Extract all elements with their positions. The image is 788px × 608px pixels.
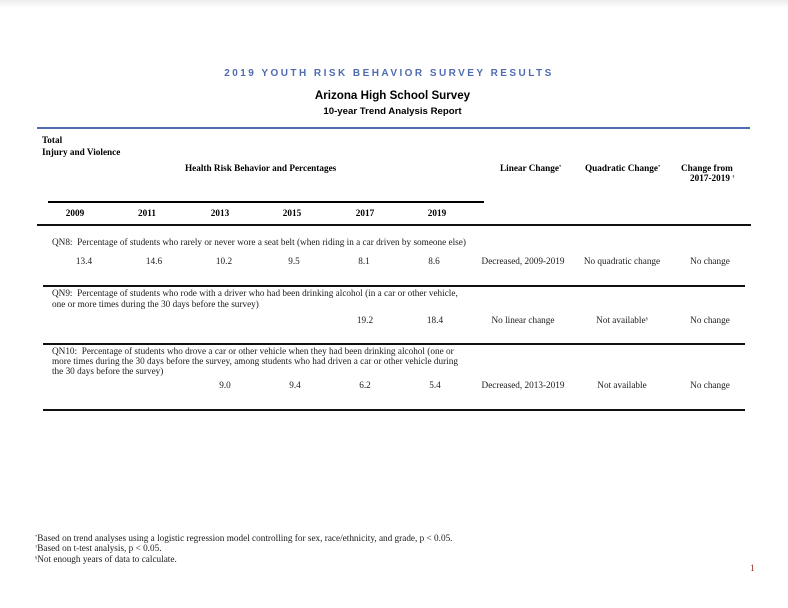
QN8 change from 2017-2019: No change	[690, 256, 730, 266]
QN8 percentages: 14.6	[146, 256, 162, 266]
QN10 description: QN10: Percentage of students who drove a car or other vehicle when they had been drinking alcohol (one or	[52, 346, 454, 356]
column heading: linear change: Linear Change*	[500, 163, 561, 173]
column heading: change from 2017-2019: 2017-2019 †	[690, 173, 734, 183]
row divider	[43, 285, 745, 287]
QN9 quadratic change: Not available§	[596, 315, 648, 325]
year headers: 2011	[138, 208, 156, 218]
row divider	[43, 343, 745, 345]
survey name heading: Arizona High School Survey	[315, 89, 470, 102]
year headers: 2019	[428, 208, 446, 218]
QN8 description: QN8: Percentage of students who rarely or never wore a seat belt (when riding in a car driven by someone else)	[52, 237, 466, 247]
QN8 percentages: 10.2	[216, 256, 232, 266]
QN9 percentages: 19.2	[357, 315, 373, 325]
report subtitle: 10-year Trend Analysis Report	[323, 106, 462, 117]
QN10 description: more times during the 30 days before the survey, among students who had driven a car or other vehicle during	[52, 356, 458, 366]
QN9 description: one or more times during the 30 days before the survey)	[52, 299, 259, 309]
year headers: 2015	[283, 208, 301, 218]
footnote: t-test: †Based on t-test analysis, p < 0.05.	[35, 542, 162, 552]
footnote: not enough data: §Not enough years of data to calculate.	[35, 554, 177, 564]
QN10 percentages: 9.0	[219, 380, 231, 390]
QN10 percentages: 5.4	[429, 380, 441, 390]
row: QN8	[52, 237, 730, 266]
QN10 percentages: 9.4	[289, 380, 301, 390]
QN8 linear change: Decreased, 2009-2019	[482, 256, 564, 266]
column heading: change from 2017-2019: Change from	[681, 163, 733, 173]
QN10 percentages: 6.2	[359, 380, 371, 390]
year headers: 2017	[356, 208, 374, 218]
QN8 percentages	[76, 256, 440, 266]
table bottom rule	[43, 409, 745, 411]
year headers: 2013	[211, 208, 229, 218]
QN8 percentages: 8.1	[358, 256, 370, 266]
QN10 change from 2017-2019: No change	[690, 380, 730, 390]
QN10 percentages	[219, 380, 441, 390]
QN9 linear change: No linear change	[492, 315, 554, 325]
year headers: 2009	[66, 208, 84, 218]
row: QN10	[52, 346, 730, 390]
year headers	[66, 208, 446, 218]
blue header rule	[37, 127, 750, 129]
report title: 2019 YOUTH RISK BEHAVIOR SURVEY RESULTS	[224, 68, 554, 79]
column heading: change from 2017-2019	[681, 163, 734, 183]
column heading: quadratic change: Quadratic Change*	[585, 163, 660, 173]
QN8 quadratic change: No quadratic change	[584, 256, 660, 266]
row: QN9	[52, 288, 730, 325]
QN9 percentages	[357, 315, 443, 325]
QN8 percentages: 13.4	[76, 256, 92, 266]
footnotes	[35, 533, 452, 564]
QN8 percentages: 9.5	[288, 256, 300, 266]
group label: total: Total	[42, 135, 62, 145]
QN9 description: QN9: Percentage of students who rode with a driver who had been drinking alcohol (in a car or other vehicle,	[52, 288, 458, 298]
QN8 percentages: 8.6	[428, 256, 440, 266]
QN10 linear change: Decreased, 2013-2019	[482, 380, 564, 390]
footnote: trend analyses: *Based on trend analyses using a logistic regression model controlling for sex, race/ethnicity, and grade, p < 0.05.	[35, 533, 452, 543]
QN9 percentages: 18.4	[427, 315, 443, 325]
group label: injury and violence: Injury and Violence	[42, 147, 120, 157]
QN10 description: the 30 days before the survey)	[52, 366, 163, 376]
QN9 change from 2017-2019: No change	[690, 315, 730, 325]
QN10 description	[52, 346, 458, 376]
QN10 quadratic change: Not available	[597, 380, 647, 390]
QN9 description	[52, 288, 458, 309]
table header bottom rule	[37, 224, 751, 226]
year header rule	[48, 201, 484, 203]
page number: 1	[750, 563, 755, 573]
column heading: health risk behavior: Health Risk Behavior and Percentages	[185, 163, 336, 173]
